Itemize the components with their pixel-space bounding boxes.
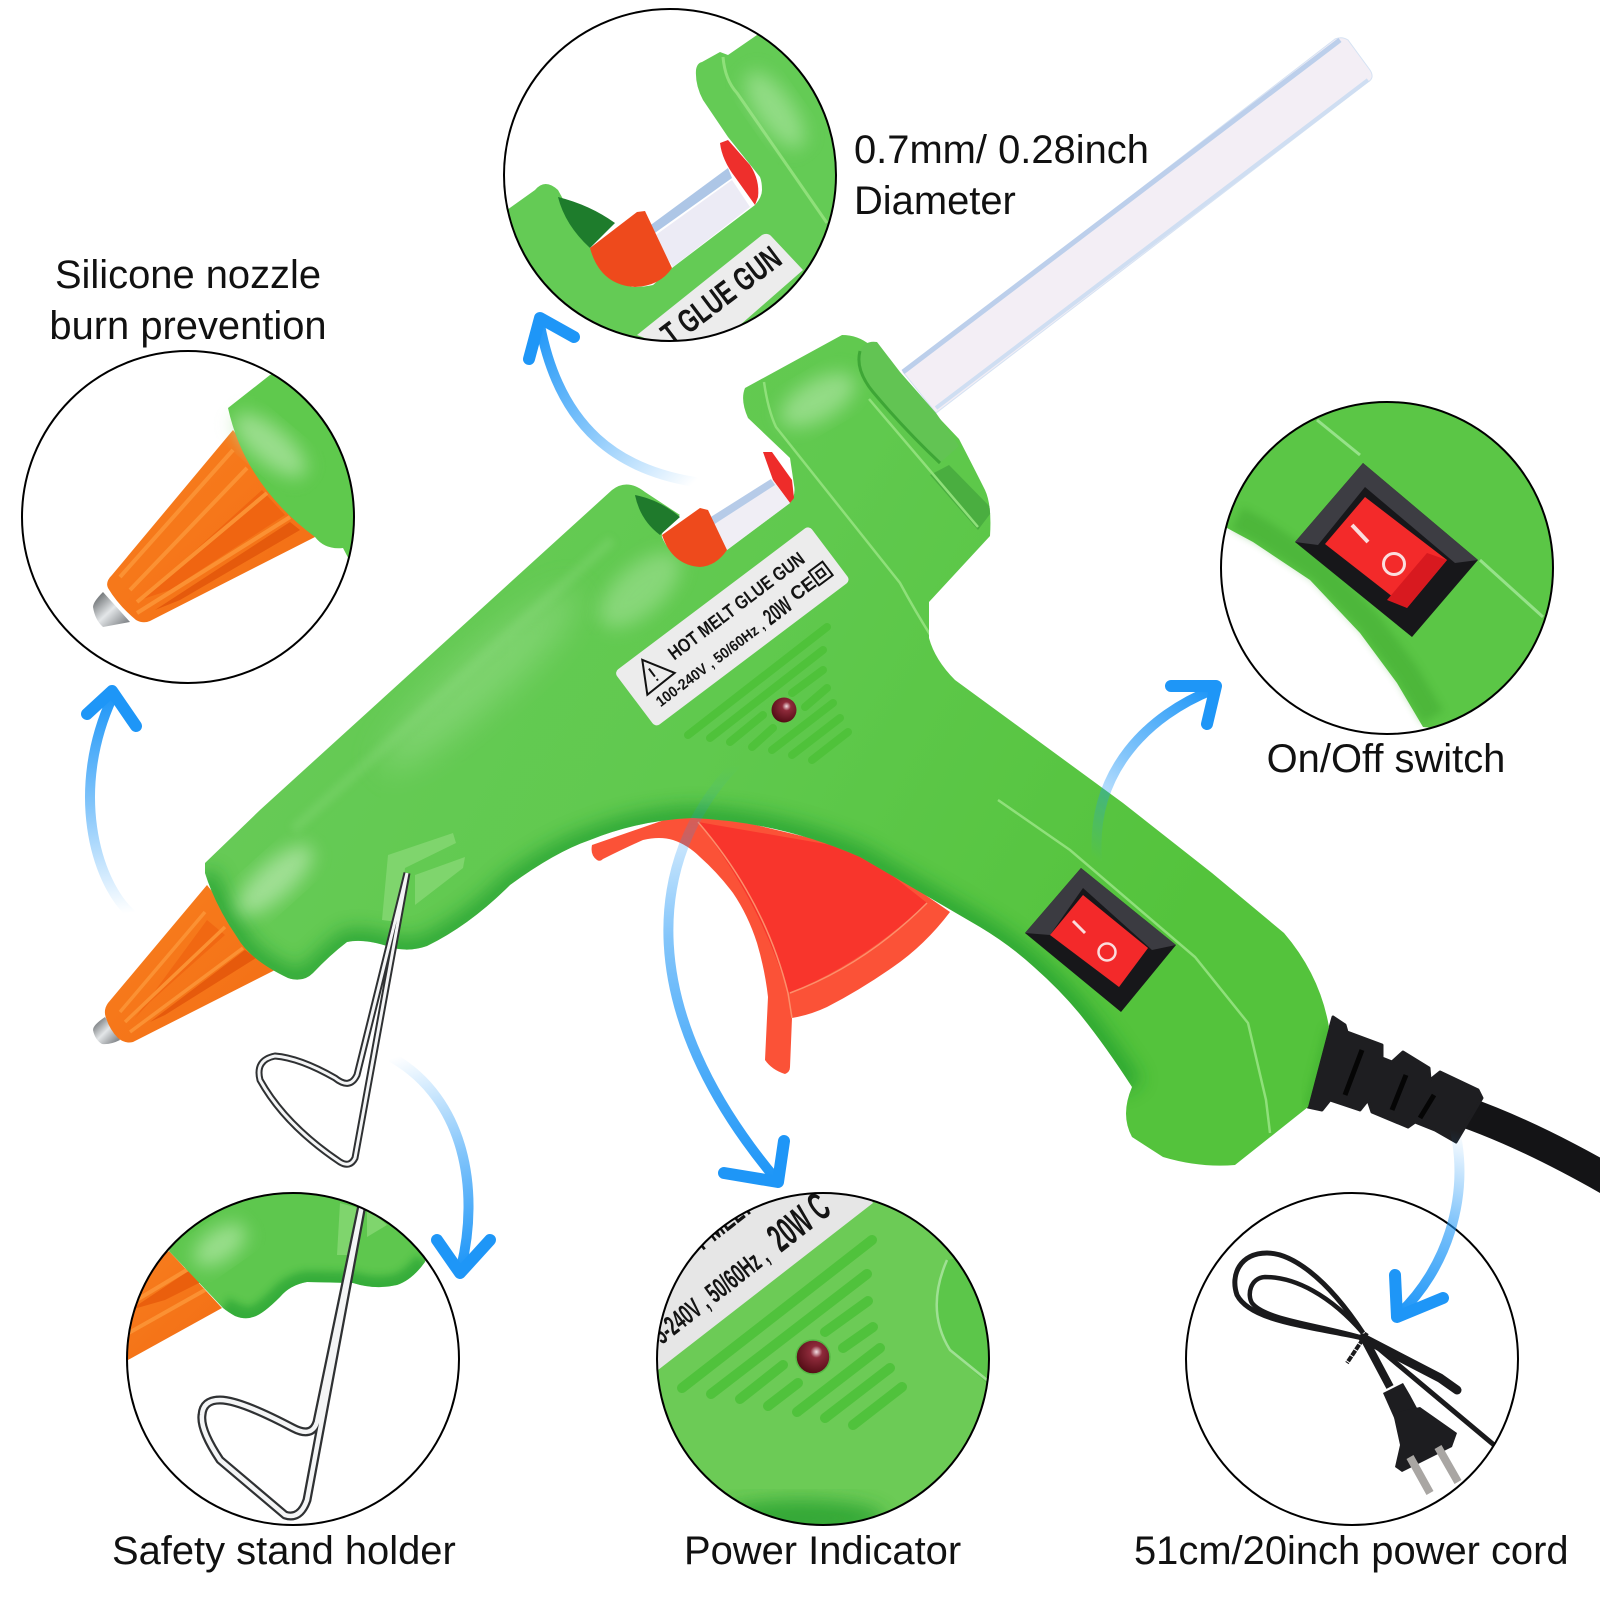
caption: power indicator: Power Indicator — [684, 1529, 961, 1573]
caption: diameter — [854, 128, 1149, 223]
product label — [614, 525, 850, 727]
CE mark: CE — [787, 573, 820, 605]
panel: power indicator detail: 20W C — [759, 1185, 839, 1260]
caption: on/off switch: On/Off switch — [1267, 737, 1505, 781]
panel: power indicator detail — [656, 1192, 990, 1526]
looped cord — [1235, 1253, 1363, 1338]
gun body — [205, 335, 1329, 1166]
barrel slot with orange collar — [635, 452, 794, 567]
zoomed label text: 5-240V , 50/60Hz , — [647, 1240, 774, 1350]
arrow: to power cord — [1395, 1130, 1459, 1317]
label heading: HOT MELT GLUE GUN — [665, 549, 809, 665]
arrow: to on/off switch — [1096, 686, 1216, 860]
power cord — [1308, 1017, 1600, 1182]
warning triangle — [629, 649, 675, 695]
zoomed stand wire — [202, 1205, 362, 1516]
plug — [1383, 1383, 1457, 1472]
caption: diameter: 0.7mm/ 0.28inch — [854, 128, 1149, 172]
label wattage: 20W — [758, 591, 797, 630]
panel: on/off switch detail — [1210, 390, 1560, 740]
arrow: to safety stand — [393, 1058, 490, 1273]
arrow: to glue stick diameter — [529, 318, 695, 482]
caption: silicone nozzle: Silicone nozzle — [55, 253, 321, 297]
raised chevron stand mount — [382, 833, 465, 922]
caption: safety stand: Safety stand holder — [112, 1529, 456, 1573]
vent slats — [688, 627, 848, 760]
glue gun illustration — [93, 38, 1600, 1182]
panel: glue stick diameter detail — [503, 8, 837, 342]
label ratings: 100-240V , 50/60Hz , — [653, 618, 768, 711]
caption: power cord: 51cm/20inch power cord — [1134, 1529, 1569, 1573]
caption: silicone nozzle — [49, 253, 327, 348]
nozzle — [93, 885, 275, 1044]
panel: power cord detail — [1186, 1193, 1518, 1525]
caption: diameter: Diameter — [854, 179, 1016, 223]
arrow: to silicone nozzle — [87, 691, 136, 913]
caption: silicone nozzle: burn prevention — [49, 304, 327, 348]
trigger — [592, 810, 950, 1074]
collar around glue stick inlet — [859, 342, 959, 463]
glue stick — [903, 38, 1372, 413]
power indicator LED — [772, 698, 796, 722]
on/off rocker switch — [1025, 868, 1176, 1012]
panel: safety stand holder detail — [100, 1180, 459, 1525]
stand wire — [259, 873, 407, 1164]
panel: power indicator detail: T MELT G — [684, 1177, 775, 1259]
arrow: to power indicator — [668, 765, 784, 1182]
panel: silicone nozzle detail — [22, 340, 370, 683]
zoomed label: T GLUE GUN — [654, 239, 788, 353]
double insulation mark — [809, 562, 833, 585]
zoomed label — [637, 234, 803, 340]
